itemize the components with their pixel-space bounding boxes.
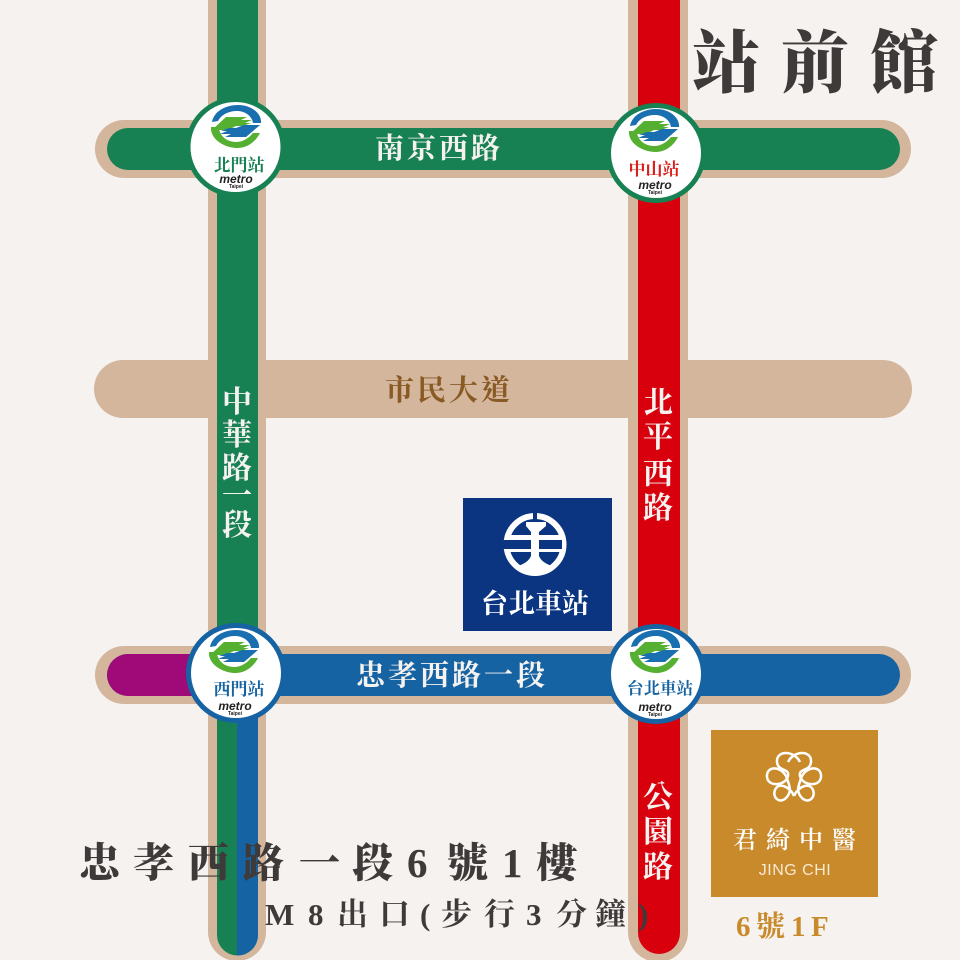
station: 西門站: Taipei	[228, 711, 243, 717]
station: 台北車站: Taipei	[648, 712, 663, 718]
panel: 君綺中醫 logo card	[711, 730, 878, 897]
station: 台北車站	[608, 626, 704, 722]
icon: railway emblem	[502, 512, 565, 573]
label: 中華路一段: 中	[222, 386, 252, 419]
label: 北平西路: 平	[643, 421, 673, 454]
station: 西門站: 西門站	[214, 679, 264, 699]
station: 北門站: metro	[219, 172, 253, 186]
icon: 君綺 knot emblem	[767, 753, 821, 800]
road: 中華路一段	[208, 0, 266, 960]
station: 中山站	[608, 106, 704, 200]
label: 南京西路: 南京西路	[375, 132, 503, 165]
station: 北門站: 北門站	[214, 155, 264, 175]
road: 市民大道: 市民大道	[385, 374, 513, 407]
road: 北平西路 and 公園路	[628, 0, 688, 960]
label: 中華路一段: 路	[222, 452, 252, 485]
station: 西門站: metro	[218, 699, 252, 713]
label: 公園路	[643, 781, 674, 884]
label: 忠孝西路一段: 忠孝西路一段	[356, 659, 548, 692]
road: 忠孝西路一段	[95, 646, 911, 704]
label: 中華路一段: 段	[222, 509, 252, 542]
station: 西門站	[188, 626, 284, 720]
label: 北平西路: 西	[643, 458, 673, 491]
label: 公園路: 公	[643, 781, 674, 814]
directions: M8 exit walking time: M8出口(步行3分鐘)	[265, 897, 648, 932]
panel: 君綺中醫 logo card: JING CHI	[759, 862, 831, 879]
title: 站前館: 站前館	[692, 26, 938, 102]
station: 台北車站: metro	[638, 700, 672, 714]
road: 市民大道	[94, 360, 912, 418]
label: 6號1F: 6號1F	[736, 910, 829, 943]
label: 中華路一段: 華	[222, 419, 252, 452]
label: 北平西路	[643, 387, 673, 525]
station: 中山站: 中山站	[628, 159, 680, 179]
station: 北門站: Taipei	[229, 184, 244, 190]
address: 忠孝西路一段6號1樓: 忠孝西路一段6號1樓	[79, 840, 580, 886]
panel: 台北車站 railway sign: 台北車站	[481, 589, 589, 619]
station: 台北車站: 台北車站	[627, 678, 693, 698]
label: 公園路: 路	[643, 851, 673, 884]
label: 北平西路: 路	[643, 492, 673, 525]
station: 中山站: metro	[638, 178, 672, 192]
station: 北門站	[188, 100, 283, 194]
label: 中華路一段	[222, 386, 252, 542]
panel: 台北車站 railway sign	[463, 498, 612, 631]
road: 南京西路	[95, 120, 911, 178]
label: 中華路一段: 一	[222, 480, 252, 513]
label: 北平西路: 北	[643, 387, 673, 420]
panel: 君綺中醫 logo card: 君綺中醫	[733, 827, 856, 854]
label: 公園路: 園	[643, 816, 673, 849]
station: 中山站: Taipei	[648, 190, 663, 196]
